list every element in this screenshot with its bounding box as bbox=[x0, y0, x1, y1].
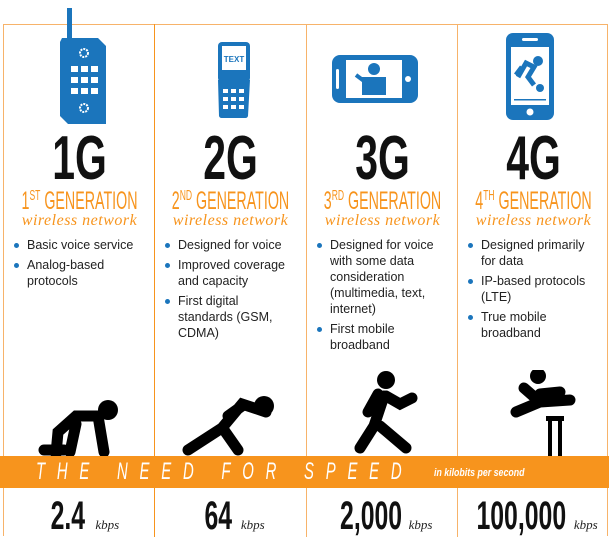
speed: 3G: 2,000 bbox=[340, 494, 402, 538]
banner title: THE NEED FOR SPEED bbox=[36, 458, 413, 485]
subheading: 3RD GENERATION bbox=[324, 187, 441, 215]
bullet list: IP-based protocols (LTE) bbox=[481, 274, 585, 304]
speed: 4G: kbps bbox=[574, 517, 598, 532]
bullet list bbox=[468, 238, 585, 340]
figure: runner bbox=[354, 371, 418, 454]
bullet list: Analog-based protocols bbox=[27, 258, 104, 288]
figure: hurdler bbox=[510, 370, 576, 456]
heading: 4G: 4G bbox=[506, 124, 561, 193]
figure: starting runner bbox=[182, 396, 274, 456]
panel: 3G bbox=[317, 55, 441, 352]
bullet list: Designed primarily for data bbox=[481, 238, 585, 268]
bullet list bbox=[165, 238, 285, 340]
speed: 2G: 64 bbox=[205, 494, 232, 538]
panel: 1G bbox=[14, 8, 137, 288]
bullet list: First digital standards (GSM, CDMA) bbox=[178, 294, 272, 340]
panel: 4G bbox=[468, 33, 592, 340]
banner note: in kilobits per second bbox=[434, 467, 524, 479]
heading: 3G: 3G bbox=[355, 124, 410, 193]
speed: 3G: kbps bbox=[409, 517, 432, 532]
speed: 2G bbox=[205, 494, 265, 538]
bullet list: Basic voice service bbox=[27, 238, 133, 252]
banner: the need for speed bbox=[0, 456, 609, 488]
subheading: 4TH GENERATION bbox=[475, 187, 592, 215]
bullet list: Designed for voice with some data consideration (multimedia, text, internet) bbox=[330, 238, 434, 316]
bullet list: Improved coverage and capacity bbox=[178, 258, 285, 288]
subtitle: wireless network bbox=[173, 212, 288, 229]
icon: 2G phone bbox=[218, 42, 250, 118]
speed: 2G: kbps bbox=[241, 517, 265, 532]
subtitle: wireless network bbox=[325, 212, 440, 229]
speed: 1G: kbps bbox=[95, 517, 119, 532]
icon: 2G phone: TEXT bbox=[224, 55, 244, 64]
speed: 1G bbox=[50, 494, 119, 538]
speed: 4G: 100,000 bbox=[477, 494, 566, 538]
speed: 1G: 2.4 bbox=[50, 494, 85, 538]
bullet list: First mobile broadband bbox=[330, 322, 395, 352]
icon: 1G phone bbox=[60, 8, 106, 124]
bullet list bbox=[317, 238, 434, 352]
bullet list bbox=[14, 238, 133, 288]
panel: 2G bbox=[165, 42, 289, 340]
subheading: 1ST GENERATION bbox=[22, 187, 137, 215]
icon: 4G phone bbox=[506, 33, 554, 120]
speed: 3G bbox=[340, 494, 432, 538]
heading: 1G: 1G bbox=[52, 124, 107, 193]
icon: 3G phone bbox=[332, 55, 418, 103]
figure: crawling bbox=[38, 400, 118, 456]
subtitle: wireless network bbox=[476, 212, 591, 229]
subheading: 2ND GENERATION bbox=[172, 187, 289, 215]
bullet list: Designed for voice bbox=[178, 238, 282, 252]
subtitle: wireless network bbox=[22, 212, 137, 229]
bullet list: True mobile broadband bbox=[481, 310, 547, 340]
heading: 2G: 2G bbox=[203, 124, 258, 193]
